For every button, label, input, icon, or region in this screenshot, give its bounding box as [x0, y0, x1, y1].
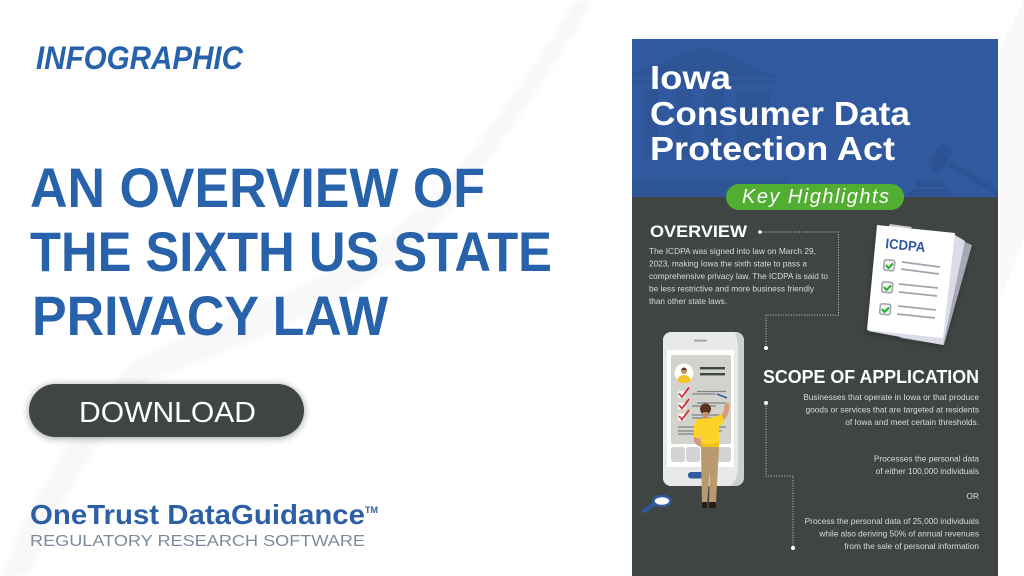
icon: smartphone with checklist [663, 332, 744, 486]
icon: magnifying glass [644, 496, 670, 511]
overview body text [649, 246, 828, 306]
section: overview: OVERVIEW [650, 222, 748, 241]
poster header [632, 39, 998, 197]
scope body text: Process the personal data of 25,000 individuals [805, 516, 979, 526]
icon: courthouse watermark [632, 46, 788, 197]
dotted connector: overview to scope [758, 230, 838, 350]
logo: OneTrust DataGuidance [30, 499, 378, 550]
key highlights pill: Key Highlights [742, 186, 889, 208]
poster title [651, 66, 910, 160]
main heading [30, 156, 552, 347]
panel: infographic poster [632, 39, 998, 576]
scope body text: from the sale of personal information [844, 541, 979, 551]
poster title: Iowa [650, 59, 732, 96]
scope body text: Processes the personal data [874, 454, 979, 464]
dotted connector: scope [764, 401, 795, 550]
icon: ICDPA checklist document [866, 224, 972, 347]
overview body text: be less restrictive and more business friendly [649, 284, 815, 294]
poster title: Consumer Data [650, 95, 911, 132]
key highlights pill [726, 184, 904, 210]
download button: DOWNLOAD [79, 397, 256, 429]
scope body text: while also deriving 50% of annual revenues [818, 528, 979, 538]
logo: OneTrust DataGuidance: OneTrust DataGuidance [30, 499, 365, 530]
scope body text [803, 392, 979, 551]
scope body text: OR [967, 491, 979, 501]
logo: OneTrust DataGuidance: REGULATORY RESEARCH SOFTWARE [30, 533, 365, 550]
icon: person writing on phone [694, 394, 729, 508]
overview body text: 2023, making Iowa the sixth state to pass a [649, 258, 807, 268]
scope body text: Businesses that operate in Iowa or that produce [803, 392, 979, 402]
overview body text: comprehensive privacy law. The ICDPA is said to [649, 271, 828, 281]
main heading: AN OVERVIEW OF [30, 156, 485, 219]
poster title: Protection Act [650, 130, 895, 167]
download button [29, 384, 304, 438]
logo: OneTrust DataGuidance: TM [365, 505, 378, 515]
scope body text: of Iowa and meet certain thresholds. [845, 417, 979, 427]
main heading: PRIVACY LAW [32, 284, 388, 347]
icon: ICDPA checklist document: ICDPA [885, 235, 926, 255]
checklist rows [880, 260, 940, 318]
icon: gavel watermark [907, 142, 998, 197]
label: INFOGRAPHIC: INFOGRAPHIC [36, 40, 244, 76]
scope body text: goods or services that are targeted at residents [806, 404, 979, 414]
section: overview [649, 222, 828, 306]
section: scope of application [763, 367, 979, 551]
overview body text: The ICDPA was signed into law on March 29, [649, 246, 816, 256]
section: scope of application: SCOPE OF APPLICATION [763, 367, 979, 387]
main heading: THE SIXTH US STATE [30, 220, 552, 283]
scope body text: of either 100,000 individuals [876, 466, 979, 476]
overview body text: than other state laws. [649, 296, 727, 306]
